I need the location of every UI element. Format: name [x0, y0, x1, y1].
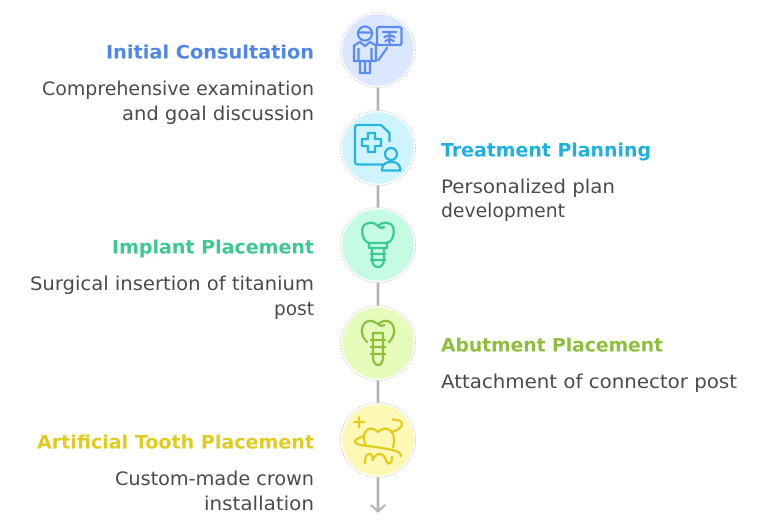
heading: Initial Consultation: Initial Consultation: [106, 42, 314, 64]
step 5: artificial tooth placement: [37, 402, 416, 515]
heading: Treatment Planning: Treatment Planning: [441, 140, 651, 162]
description: personalized plan: development: [441, 201, 565, 222]
description: comprehensive examination: Comprehensive examination: [42, 79, 314, 100]
description: personalized plan: Personalized plan: [441, 177, 615, 198]
heading: Abutment Placement: Abutment Placement: [441, 334, 663, 356]
description: surgical insertion: [30, 274, 314, 320]
step 2: treatment planning: [340, 110, 651, 222]
description: surgical insertion: post: [274, 299, 314, 320]
icon: tooth with sparkle: [340, 402, 416, 478]
step 3: implant placement: [30, 208, 416, 320]
description: custom-made crown: installation: [204, 494, 314, 515]
step 1: initial consultation: [42, 12, 416, 125]
heading: Implant Placement: Implant Placement: [112, 236, 314, 258]
connector line with arrow: [372, 86, 384, 512]
description: comprehensive examination: [42, 79, 314, 125]
icon: doctor and x-ray screen: [340, 12, 416, 88]
icon: implant inside tooth: [340, 306, 416, 380]
icon: implant with crown: [340, 208, 416, 282]
icon: medical document and person: [340, 110, 416, 186]
description: personalized plan: [441, 177, 615, 222]
description: custom-made crown: Custom-made crown: [115, 469, 314, 490]
description: custom-made crown: [115, 469, 314, 515]
description: surgical insertion: Surgical insertion of titanium: [30, 274, 314, 295]
heading: Artificial Tooth Placement: Artificial Tooth Placement: [37, 432, 314, 454]
step 4: abutment placement: [340, 306, 737, 393]
description: attachment of connector post: Attachment of connector post: [441, 372, 737, 393]
description: comprehensive examination: and goal discussion: [122, 104, 314, 125]
